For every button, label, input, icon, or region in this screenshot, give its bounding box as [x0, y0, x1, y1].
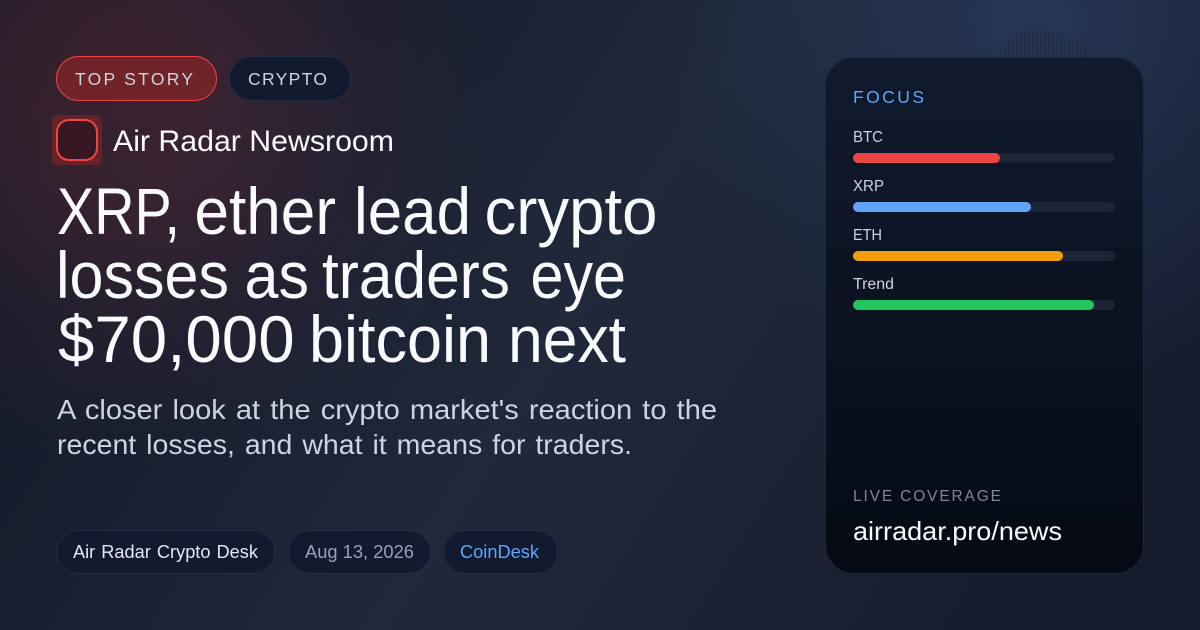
- tag: crypto: [230, 56, 350, 100]
- brand name: Air Radar Newsroom: [113, 125, 394, 158]
- headline: $70,000: [58, 302, 295, 376]
- subheading: A closer look at the crypto market's reaction to the: [57, 394, 717, 425]
- bar: XRP: [853, 178, 1115, 212]
- icon: newsroom logo: [52, 115, 102, 165]
- chip: date: Aug 13, 2026: [305, 541, 414, 562]
- bar: Trend: Trend: [853, 276, 894, 293]
- url: airradar.pro/news: [853, 516, 1062, 546]
- bar: Trend: [853, 276, 1115, 310]
- subheading: [57, 394, 717, 460]
- headline: traders: [322, 238, 510, 312]
- bar: XRP: XRP: [853, 178, 884, 195]
- headline: ether: [194, 174, 336, 248]
- headline: [56, 174, 658, 376]
- bar: BTC: BTC: [853, 129, 883, 146]
- headline: next: [508, 302, 626, 376]
- bar: BTC: [853, 129, 1115, 163]
- bar: ETH: ETH: [853, 227, 882, 244]
- headline: lead: [354, 174, 471, 248]
- headline: losses: [56, 238, 229, 312]
- chip: source: CoinDesk: [460, 541, 540, 562]
- chip: source: [444, 530, 558, 574]
- tag: crypto: CRYPTO: [248, 69, 327, 89]
- headline: crypto: [484, 174, 658, 248]
- bar: ETH: [853, 227, 1115, 261]
- live coverage label: LIVE COVERAGE: [853, 488, 1001, 505]
- panel: focus: [826, 58, 1144, 574]
- headline: eye: [530, 238, 626, 312]
- subheading: recent losses, and what it means for traders.: [57, 429, 632, 460]
- headline: as: [244, 238, 309, 312]
- tag: top story: [56, 56, 216, 100]
- tag: top story: TOP STORY: [75, 69, 193, 89]
- chip: desk: [56, 530, 274, 574]
- headline: bitcoin: [309, 302, 491, 376]
- headline: XRP,: [57, 174, 180, 248]
- chip: desk: Air Radar Crypto Desk: [73, 541, 259, 562]
- focus heading: FOCUS: [853, 87, 924, 107]
- chip: date: [288, 530, 430, 574]
